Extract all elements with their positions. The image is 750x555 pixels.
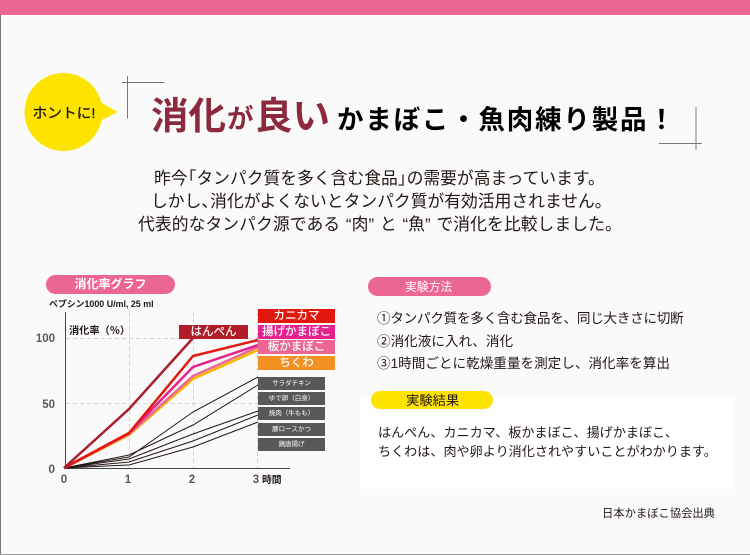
series label: 鶏唐揚げ: 鶏唐揚げ: [278, 441, 304, 448]
pill: method heading: 実験方法: [405, 280, 452, 294]
method steps: ①タンパク質を多く含む食品を、同じ大きさに切断: [377, 311, 683, 326]
title crop marks: [122, 76, 702, 150]
pill: results heading: 実験結果: [406, 393, 459, 408]
line chart: 3: [253, 474, 259, 486]
pepsin note: ペプシン1000 U/ml, 25 ml: [49, 299, 154, 309]
series label: 揚げかまぼこ: 揚げかまぼこ: [262, 326, 331, 338]
title: [151, 95, 677, 137]
line chart: 2: [189, 474, 195, 486]
line chart: 1: [125, 474, 132, 486]
panel: results: [360, 397, 734, 489]
results text: ちくわは、肉や卵より消化されやすいことがわかります。: [378, 444, 717, 459]
series label: 板かまぼこ: 板かまぼこ: [268, 341, 325, 353]
title: が: [227, 104, 254, 134]
line chart: 0: [61, 474, 67, 486]
badge: ホントに! speech bubble: [24, 73, 118, 151]
series label: 板かまぼこ: [258, 340, 335, 354]
method steps: ②消化液に入れ、消化: [377, 334, 513, 348]
method steps: [377, 311, 684, 371]
results text: [378, 425, 717, 459]
top pink band: [0, 0, 750, 15]
line chart: 0: [48, 462, 55, 476]
series label: ちくわ: [258, 356, 335, 370]
intro paragraph: しかし、消化がよくないとタンパク質が有効活用されません。: [151, 192, 612, 211]
line chart: 消化率（％）: [69, 324, 130, 337]
intro paragraph: [138, 169, 622, 234]
series label: サラダチキン: サラダチキン: [272, 380, 311, 387]
pill: results heading: [371, 391, 493, 409]
series label: 焼肉: 焼肉（牛もも）: [269, 410, 314, 417]
series label: 鶏唐揚げ: [258, 438, 325, 451]
method steps: ③1時間ごとに乾燥重量を測定し、消化率を算出: [377, 356, 670, 371]
series label: 豚ロースかつ: [258, 423, 325, 436]
series label: はんぺん: [179, 325, 248, 339]
title: 良い: [255, 95, 330, 137]
pill: method heading: [368, 277, 491, 296]
badge: ホントに! speech bubble: ホントに!: [32, 105, 96, 121]
title: かまぼこ・魚肉練り製品！: [337, 105, 677, 135]
pill: graph heading: [46, 275, 175, 294]
series label: ゆで卵: [258, 392, 325, 405]
line chart: 50: [42, 399, 55, 411]
series label: サラダチキン: [258, 377, 325, 390]
title: 消化: [151, 95, 226, 137]
left page edge: [0, 15, 1, 555]
source note: 日本かまぼこ協会出典: [602, 508, 715, 520]
intro paragraph: 代表的なタンパク源である “肉” と “魚” で消化を比較しました。: [138, 215, 622, 234]
series label: カニカマ: カニカマ: [274, 310, 320, 322]
series label: 豚ロースかつ: 豚ロースかつ: [272, 426, 311, 433]
series label: 焼肉: [258, 407, 325, 420]
intro paragraph: 昨今「タンパク質を多く含む食品」の需要が高まっています。: [154, 169, 605, 188]
results text: はんぺん、カニカマ、板かまぼこ、揚げかまぼこ、: [378, 425, 678, 440]
line chart: 時間: [262, 473, 282, 486]
series label: ゆで卵: ゆで卵（白身）: [269, 395, 314, 402]
bottom page edge: [0, 554, 750, 555]
pill: graph heading: 消化率グラフ: [74, 277, 146, 291]
line chart: 100: [36, 333, 55, 345]
series label: ちくわ: ちくわ: [279, 357, 314, 369]
series label: カニカマ: [258, 309, 335, 323]
series label: はんぺん: はんぺん: [190, 326, 236, 338]
